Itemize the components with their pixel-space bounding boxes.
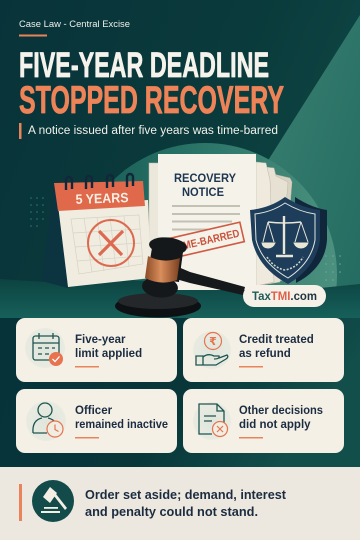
card label: Officer <box>75 405 113 417</box>
icon: calendar check <box>33 333 63 366</box>
gavel <box>115 236 245 318</box>
conclusion text: Order set aside; demand, interest <box>85 487 287 502</box>
notice heading <box>174 171 236 199</box>
notice heading: NOTICE <box>182 185 224 199</box>
card: officer inactive <box>16 389 177 453</box>
TaxTMI logo pill <box>243 285 326 307</box>
card label <box>75 334 142 360</box>
dot pattern left <box>30 197 44 227</box>
icon: rupee in hand <box>196 332 228 365</box>
shield with scales <box>250 197 327 284</box>
notice text lines <box>172 205 240 230</box>
notice documents <box>149 154 292 290</box>
back papers <box>149 162 292 288</box>
red cross circle <box>88 220 134 266</box>
card: other decisions <box>183 389 344 453</box>
conclusion panel <box>0 467 360 540</box>
card label: Other decisions <box>239 405 323 417</box>
calendar heading: 5 YEARS <box>75 190 129 207</box>
card: credit treated as refund <box>183 318 344 382</box>
calendar grid <box>71 215 143 274</box>
icon: rupee in hand: ₹ <box>209 335 217 348</box>
time-barred stamp: TIME-BARRED <box>174 228 241 254</box>
card label <box>75 405 168 431</box>
icon: person with clock <box>33 403 63 437</box>
title <box>19 46 284 122</box>
main notice page <box>158 154 256 290</box>
calendar rings <box>66 174 133 190</box>
gavel head <box>141 236 188 299</box>
card: five-year limit <box>16 318 177 382</box>
card label: as refund <box>239 348 291 360</box>
conclusion text: and penalty could not stand. <box>85 504 258 519</box>
kicker label: Case Law - Central Excise <box>19 19 130 29</box>
card label: remained inactive <box>75 419 168 431</box>
card label: limit applied <box>75 348 142 360</box>
icon: gavel badge <box>32 480 74 522</box>
card label: did not apply <box>239 419 311 431</box>
scales of justice <box>262 216 308 270</box>
card label <box>239 334 314 360</box>
gavel base <box>115 294 201 318</box>
card label <box>239 405 323 431</box>
card label: Credit treated <box>239 334 314 346</box>
card label: Five-year <box>75 334 126 346</box>
subtitle: A notice issued after five years was time-barred <box>28 125 278 137</box>
notice heading: RECOVERY <box>174 171 236 185</box>
TaxTMI logo pill: TaxTMI.com <box>252 291 317 303</box>
conclusion text <box>85 487 287 519</box>
gavel handle <box>176 266 245 295</box>
desk calendar <box>42 174 151 288</box>
kicker underline <box>19 34 47 36</box>
icon: document with cross <box>199 404 228 436</box>
copper band <box>145 256 180 283</box>
dot pattern right <box>325 255 341 281</box>
